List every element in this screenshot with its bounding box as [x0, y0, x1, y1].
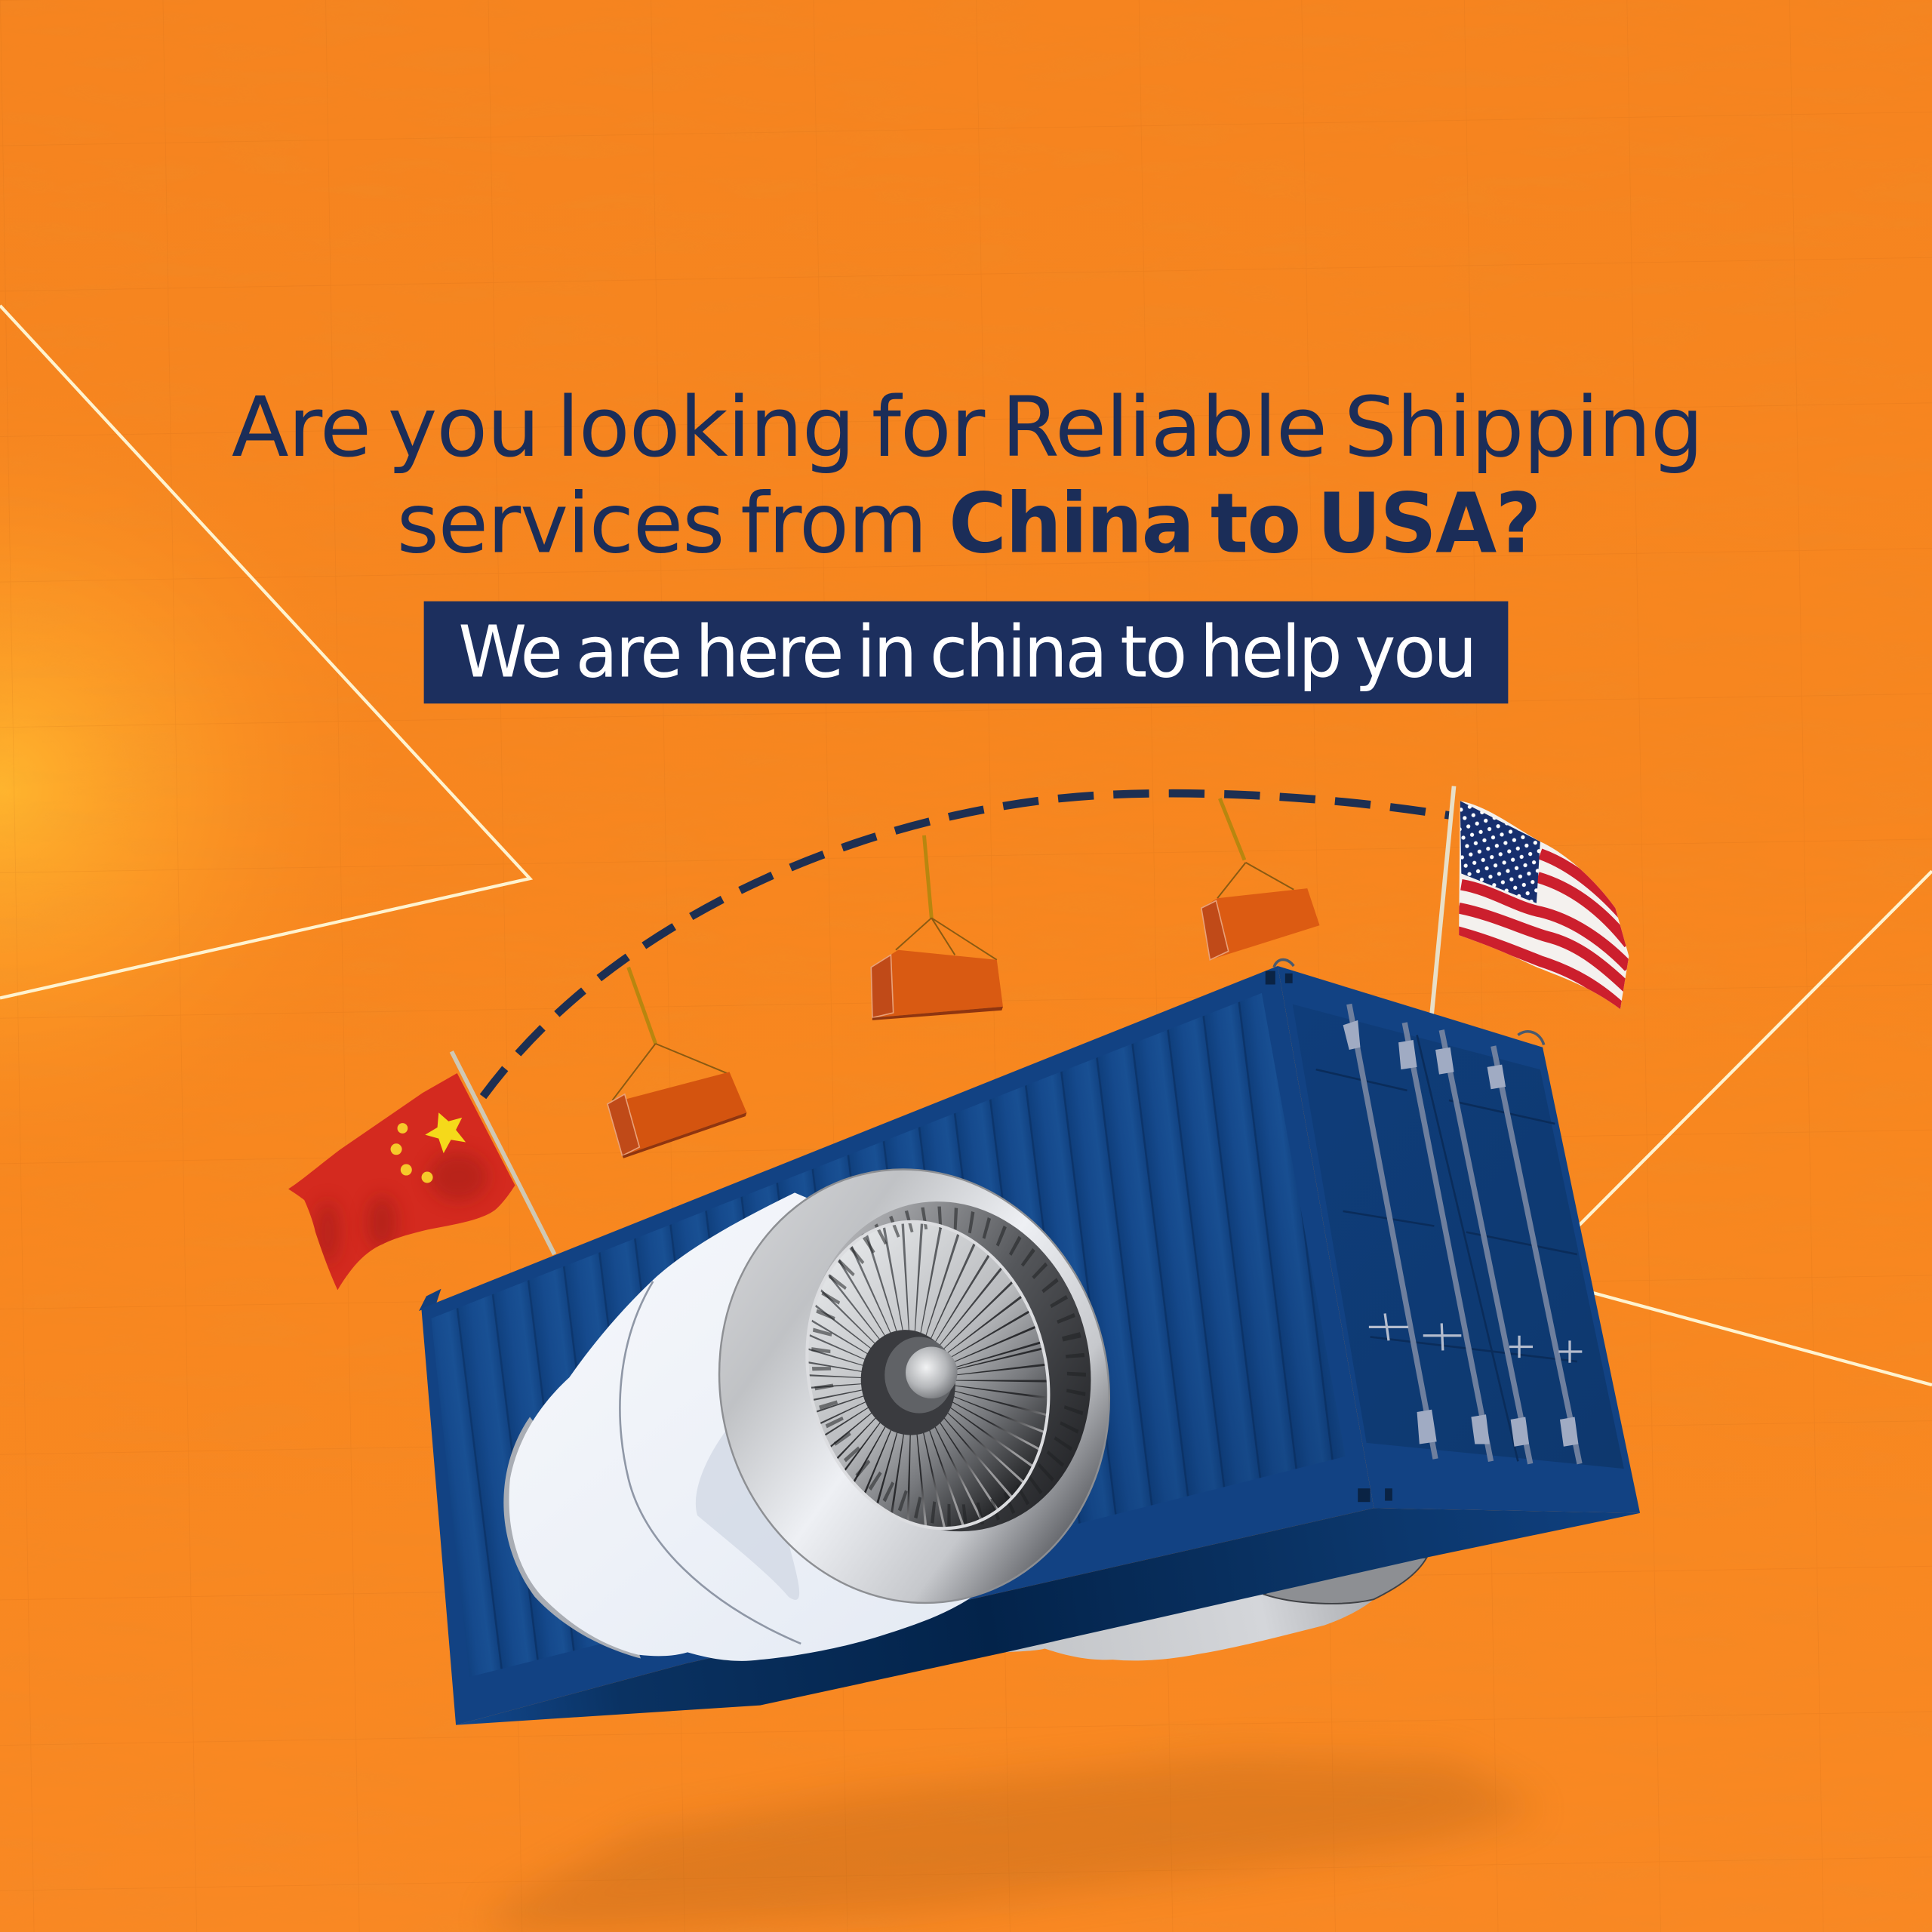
- door face: [1278, 966, 1640, 1513]
- engine intake lip: [674, 1128, 1155, 1644]
- red cloth: [288, 1073, 515, 1291]
- usa flag pole: [1432, 786, 1454, 1014]
- usa flag: [1429, 786, 1629, 1014]
- lower second engine: [1005, 1558, 1427, 1660]
- china flag: [277, 1051, 555, 1300]
- banner: [424, 601, 1508, 703]
- lock rod 4: [1487, 1046, 1580, 1464]
- title: [232, 379, 1703, 571]
- ground shadow: [493, 1756, 1540, 1932]
- container belly: [456, 1508, 1640, 1725]
- fan ring: [776, 1196, 1080, 1555]
- container top-left corner lug: [419, 1289, 441, 1311]
- container side frame: [421, 966, 1374, 1725]
- nacelle reflection: [696, 1404, 799, 1600]
- title line 1: Are you looking for Reliable Shipping: [232, 379, 1703, 475]
- decorative lines: right: [1578, 871, 1932, 1385]
- corner castings: [1266, 971, 1392, 1502]
- hub cone: [884, 1337, 954, 1414]
- hanging container 2: [871, 835, 1003, 1020]
- lock rod 2: [1398, 1023, 1491, 1461]
- large star: [425, 1112, 466, 1153]
- container chains: [1274, 960, 1544, 1044]
- dashed route arc: [483, 793, 1451, 1097]
- door panel lines: [1316, 1035, 1577, 1461]
- usa flag cloth: [1459, 801, 1629, 1009]
- nacelle body: [509, 1192, 1084, 1661]
- lock rod 1: [1343, 1004, 1437, 1459]
- nacelle rear rim: [503, 1417, 641, 1659]
- door inner panel: [1293, 1004, 1624, 1469]
- flag pole: [451, 1051, 555, 1254]
- hanging container 1: [608, 968, 746, 1158]
- nacelle seam: [620, 1281, 801, 1644]
- hanging container 3: [1201, 798, 1320, 960]
- corrugated side panel: [431, 993, 1346, 1677]
- intake inner rim: [772, 1171, 1125, 1562]
- small stars: [391, 1123, 433, 1183]
- fan disc: [808, 1223, 1048, 1527]
- shipping container: [419, 966, 1640, 1725]
- decorative line: left triangle: [0, 306, 530, 998]
- jet engine: [503, 1168, 1110, 1661]
- banner text: We are here in china to help you: [458, 611, 1475, 694]
- spinner nose: [906, 1346, 958, 1398]
- side panel shading: [431, 993, 1346, 1677]
- hub: [850, 1320, 966, 1445]
- fan blades: [777, 1245, 1046, 1515]
- title line 2: services from: [397, 475, 927, 571]
- duct outer blades: [790, 1190, 1108, 1543]
- lock rod 3: [1435, 1030, 1531, 1464]
- title emphasis: China to USA?: [949, 475, 1540, 571]
- cross handles: [1369, 1313, 1582, 1363]
